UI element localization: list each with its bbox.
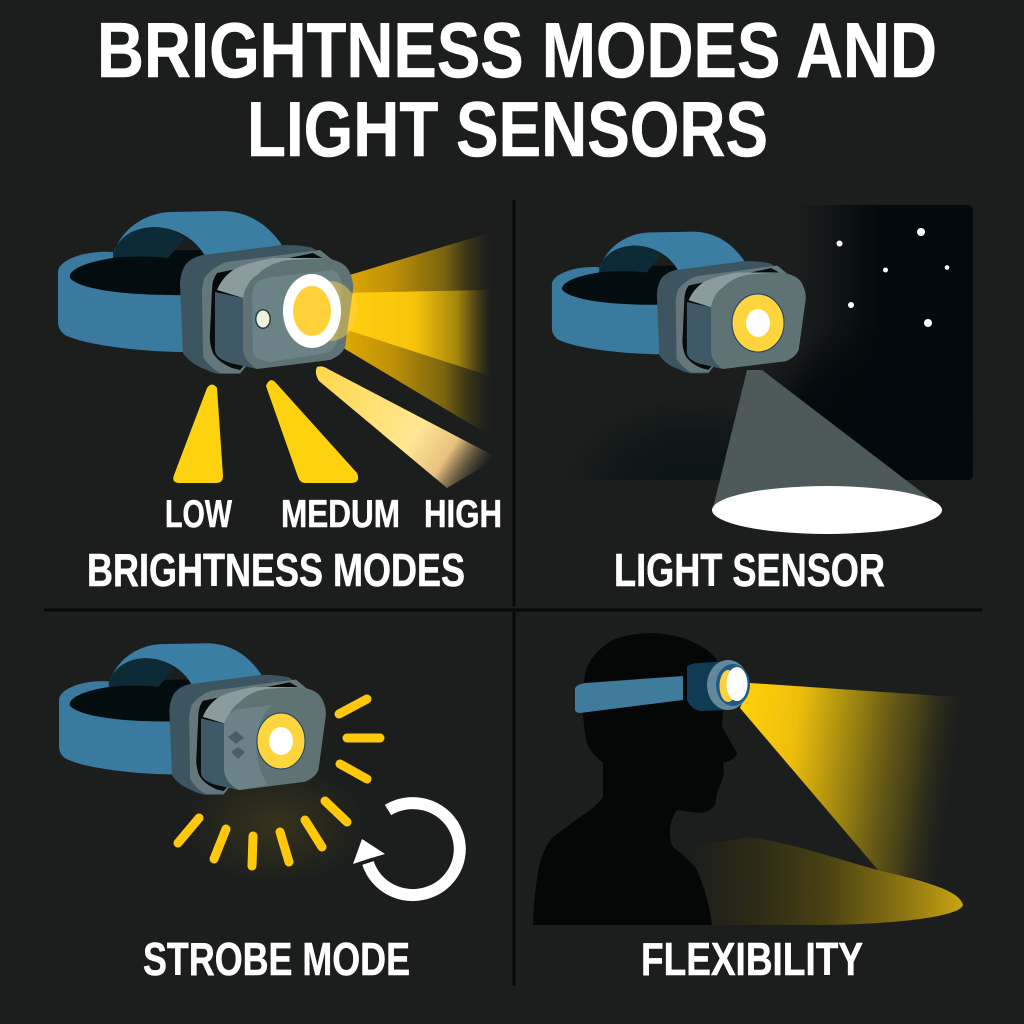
ground light pool — [675, 837, 963, 925]
dark night sky panel — [606, 205, 973, 480]
light pool — [712, 486, 942, 534]
heading: flexibility: FLEXIBILITY — [641, 933, 863, 985]
icon: low beam — [173, 384, 223, 483]
icon: headlamp — [552, 232, 806, 373]
light cone — [713, 370, 932, 508]
heading: light sensor: LIGHT SENSOR — [614, 544, 885, 596]
icon: cycle arrow — [353, 803, 460, 895]
heading: strobe mode: STROBE MODE — [143, 933, 410, 985]
head silhouette — [533, 633, 737, 925]
icon: light beam from headlamp — [330, 232, 492, 437]
label: high: HIGH — [424, 493, 502, 536]
title: LIGHT SENSORS — [247, 85, 768, 173]
heading: brightness modes: BRIGHTNESS MODES — [87, 544, 465, 596]
icon: headband — [575, 676, 683, 713]
glow under lamp — [185, 765, 365, 885]
icon: medium beam — [266, 380, 358, 483]
label: medium: MEDUM — [281, 493, 400, 536]
icon: headlamp front view — [58, 211, 357, 374]
icon: headlamp side view — [687, 660, 750, 711]
panel: flexibility — [533, 633, 972, 985]
label: low: LOW — [165, 493, 232, 536]
panel: brightness modes — [58, 211, 502, 596]
light beam — [740, 683, 972, 892]
panel: light sensor — [552, 205, 980, 596]
icon: stars — [836, 228, 949, 327]
icon: headlamp — [59, 643, 326, 795]
icon: strobe flash lines — [178, 699, 380, 866]
icon: high beam — [316, 366, 498, 488]
panel: strobe mode — [59, 643, 460, 985]
title — [97, 6, 937, 173]
